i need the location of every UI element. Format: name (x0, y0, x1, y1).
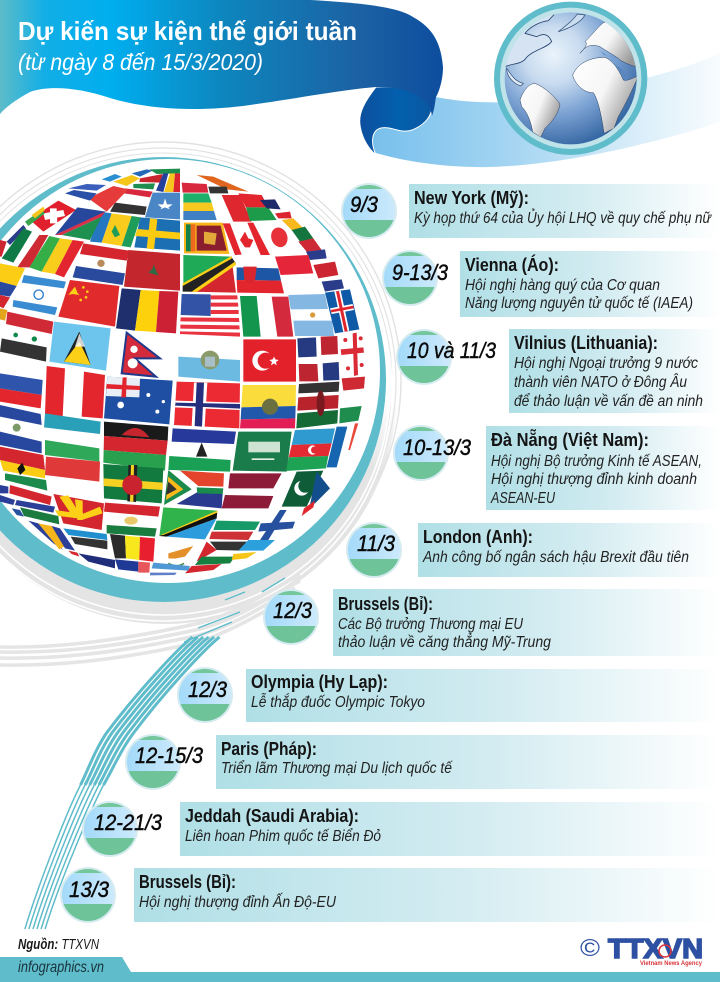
outer grey rings (0, 142, 401, 618)
light blue ribbon (372, 53, 720, 167)
teal ring (0, 157, 386, 602)
place: Vilnius (Lithuania): (514, 333, 658, 353)
date badge (380, 248, 440, 309)
description: Hội nghị hàng quý của Cơ quan (465, 277, 660, 294)
event row: Paris (123, 732, 720, 793)
date: 9-13/3 (392, 260, 449, 285)
description: Năng lượng nguyên tử quốc tế (IAEA) (465, 295, 693, 312)
flag: Malawi (103, 422, 168, 471)
flag: Japan (269, 225, 290, 249)
grey swoosh under globe (0, 160, 397, 665)
date: 10-13/3 (403, 435, 472, 460)
flag: Romania (116, 288, 178, 333)
description: ASEAN-EU (490, 490, 556, 507)
text box (418, 523, 720, 577)
text box (486, 426, 720, 510)
flag: Argentina (288, 294, 334, 336)
flag: Norway (174, 382, 240, 428)
icon: earth globe (494, 2, 647, 155)
date: 11/3 (357, 531, 396, 556)
flag: United States (180, 294, 240, 337)
text box (180, 802, 720, 856)
place: Paris (Pháp): (221, 739, 317, 759)
place: Jeddah (Saudi Arabia): (185, 806, 359, 826)
flag: Somalia (145, 193, 180, 219)
title: Dự kiến sự kiện thế giới tuần (18, 16, 357, 46)
date badge (58, 865, 118, 926)
flag: Belgium (110, 534, 155, 562)
flag: Ecuador (240, 385, 296, 428)
flag: San Marino (178, 351, 240, 382)
flag: Qatar band (222, 473, 282, 508)
flag: Saudi Arabia (233, 432, 292, 472)
flag: North Macedonia (53, 494, 104, 530)
flag: Namibia (55, 207, 106, 240)
date: 12-21/3 (94, 810, 163, 835)
flags: north-east cap (222, 193, 344, 292)
description: Hội nghị Ngoại trưởng 9 nước (514, 355, 698, 372)
description (338, 616, 551, 651)
text box (246, 669, 720, 722)
ribbon fold (360, 87, 432, 155)
text box (509, 329, 720, 413)
event row: Brussels, summit (58, 865, 720, 926)
flag: Canada (223, 223, 270, 255)
description: thảo luận về căng thẳng Mỹ-Trung (338, 633, 551, 651)
place: Brussels (Bỉ): (139, 872, 236, 892)
logo: TTXVN: TTXVN (608, 933, 703, 964)
event row: New York (339, 181, 720, 242)
date: 10 và 11/3 (407, 338, 497, 363)
flag: Iceland (325, 289, 359, 333)
flag: Turkey (243, 339, 296, 382)
description: Anh công bố ngân sách hậu Brexit đầu tiên (422, 549, 689, 566)
sphere backdrop (0, 159, 380, 583)
description (465, 277, 693, 312)
description: Hội nghị thượng đỉnh Ấn Độ-EU (139, 893, 337, 911)
place: Vienna (Áo): (465, 254, 559, 275)
flag globe (0, 169, 365, 575)
flag: Uzbekistan (44, 413, 101, 482)
footer bar (0, 957, 720, 982)
flag: Tajikistan (104, 503, 160, 537)
place: London (Anh): (423, 527, 533, 547)
flag: Ghana (0, 447, 47, 491)
place: Brussels (Bỉ): (338, 594, 433, 614)
text box (460, 251, 720, 317)
flag: Colombia (0, 263, 25, 308)
description: Hội nghị thượng đỉnh kinh doanh (491, 471, 697, 488)
description: Liên hoan Phim quốc tế Biển Đỏ (185, 828, 381, 845)
event row: Da Nang (391, 423, 720, 510)
flag: South Africa (164, 470, 224, 508)
flag: Dominican Republic (297, 336, 339, 381)
description (490, 453, 702, 507)
place: Olympia (Hy Lạp): (251, 672, 388, 692)
flag: Saint Kitts (183, 255, 236, 293)
flag: Cyprus (168, 546, 193, 566)
date badge (175, 665, 235, 726)
text box (333, 589, 720, 656)
flags: top cap (65, 169, 248, 215)
text box (409, 184, 720, 238)
event row: London (344, 520, 720, 581)
flag: Azerbaijan (286, 428, 335, 471)
event row: Jeddah (80, 799, 720, 860)
flag: Paraguay (73, 243, 129, 285)
flag: Saint Vincent (90, 212, 141, 247)
flag: Morocco (124, 250, 180, 291)
flag: El Salvador (0, 405, 42, 453)
flag: Peru (45, 366, 105, 418)
header banner (0, 0, 443, 116)
flag: Lesotho (168, 428, 236, 472)
description: Triển lãm Thương mại Du lịch quốc tế (221, 760, 453, 777)
flag: Gabon (183, 193, 217, 220)
place: Đà Nẵng (Việt Nam): (491, 428, 649, 450)
flag: Italy (240, 296, 293, 337)
description: để thảo luận về vấn đề an ninh (514, 393, 703, 410)
date badge (339, 181, 399, 242)
event row: Vienna (380, 248, 720, 317)
date badge (123, 732, 183, 793)
flags: lower right (185, 510, 295, 573)
event row: Brussels, trade (261, 587, 720, 656)
event row: Olympia (175, 665, 720, 726)
logo: TTXVN: Vietnam News Agency (640, 960, 702, 967)
description: thành viên NATO ở Đông Âu (514, 374, 687, 391)
flag: Kenya (296, 382, 339, 428)
flag: Mali (29, 236, 84, 277)
flags: right edge (327, 377, 365, 467)
flag: Israel (13, 275, 66, 315)
flags: western cap (0, 207, 48, 267)
date: 9/3 (350, 192, 379, 217)
flag: Switzerland (29, 201, 76, 232)
logo: TTXVN (580, 933, 703, 967)
flag: Russia (0, 373, 43, 408)
flag: Nepal (122, 333, 160, 377)
flag: Tanzania (159, 507, 217, 539)
flag: Syria (0, 308, 53, 362)
logo: TTXVN: © (580, 935, 600, 962)
date: 12/3 (273, 598, 313, 623)
flag: Australia (104, 377, 173, 424)
place: New York (Mỹ): (414, 188, 529, 208)
website: infographics.vn (18, 959, 104, 976)
text box (216, 735, 720, 789)
date badge (80, 799, 140, 860)
flag: Georgia (341, 333, 364, 376)
description (514, 355, 703, 410)
flag: Dominica (103, 464, 163, 503)
date badge (391, 423, 451, 484)
source: Nguồn: TTXVN (18, 936, 99, 953)
date: 12/3 (188, 677, 228, 702)
description: Các Bộ trưởng Thương mại EU (338, 616, 524, 633)
text box (134, 868, 720, 922)
date badge (394, 327, 454, 388)
date: 13/3 (69, 877, 110, 902)
flag: Singapore (275, 255, 313, 275)
event row: Vilnius (394, 327, 720, 413)
flag: Slovakia (237, 267, 284, 293)
flag: Pakistan (282, 471, 330, 516)
date badge (344, 520, 404, 581)
date: 12-15/3 (135, 743, 204, 768)
flag: Saint Lucia (49, 322, 111, 371)
tail: teal lines (25, 578, 285, 929)
flags: lower left (0, 485, 190, 575)
flag: Sri Lanka (184, 223, 229, 254)
description: Lễ thắp đuốc Olympic Tokyo (251, 694, 425, 711)
date badge (261, 587, 321, 648)
subtitle: (từ ngày 8 đến 15/3/2020) (18, 49, 263, 75)
flag: Sweden (134, 217, 180, 251)
flag: China (58, 280, 119, 327)
